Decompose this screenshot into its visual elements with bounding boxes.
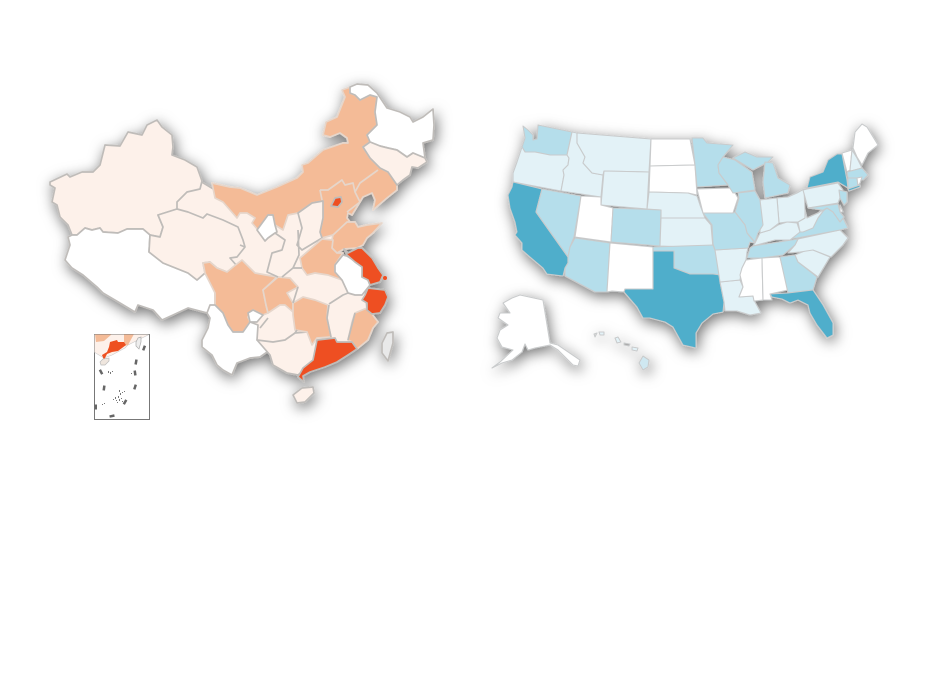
state: Kansas	[660, 218, 713, 248]
province: Tibet	[65, 228, 215, 320]
state: Pennsylvania	[803, 183, 843, 208]
state: North Carolina	[788, 230, 848, 257]
state: Connecticut	[848, 178, 858, 189]
state: Idaho	[561, 132, 603, 197]
province: Anhui	[335, 255, 370, 295]
state: Long Island	[848, 185, 860, 191]
state: Maryland	[808, 204, 844, 222]
state: Rhode Island	[857, 177, 862, 186]
state: Nebraska	[647, 192, 705, 218]
province: Henan	[300, 239, 343, 280]
state: Arkansas	[715, 248, 748, 282]
state: Oklahoma	[653, 245, 720, 275]
state: Oregon	[513, 147, 569, 191]
state: South Dakota	[649, 165, 697, 195]
island: Hainan	[293, 387, 314, 403]
state: Hawaii Kauai	[599, 332, 604, 335]
island: Taiwan	[382, 332, 393, 361]
state: Georgia	[780, 255, 817, 293]
state: Hawaii Oahu	[615, 337, 621, 343]
province borders over orange	[320, 170, 378, 212]
map: United States	[492, 124, 878, 370]
province: Shandong	[331, 222, 382, 253]
province: Zhejiang	[362, 288, 388, 314]
map: China provinces	[50, 84, 434, 403]
state: Louisiana	[720, 280, 761, 315]
state: Washington	[522, 125, 572, 155]
maps canvas	[44, 78, 888, 420]
state: Massachusetts	[847, 168, 868, 180]
state: Mississippi	[739, 258, 763, 301]
state: Hawaii main island	[639, 356, 649, 370]
province: Fujian	[348, 308, 378, 349]
province: Qinghai	[149, 209, 245, 280]
state: Ohio	[777, 189, 805, 223]
region: central pale provinces	[150, 178, 367, 373]
state: Wisconsin	[718, 157, 755, 193]
state: Alaska	[492, 295, 580, 368]
state: Illinois	[735, 191, 763, 242]
province: Shanxi	[297, 201, 323, 250]
state: New Mexico	[607, 243, 653, 292]
state: Missouri	[703, 212, 755, 250]
state: Iowa	[697, 188, 738, 213]
state: Colorado	[611, 208, 661, 246]
state: Delaware	[840, 205, 843, 212]
state: California	[508, 182, 568, 276]
province: Jilin	[363, 142, 427, 185]
state: Arizona	[565, 238, 610, 292]
state: Texas	[624, 251, 724, 348]
state: South Carolina	[795, 250, 830, 277]
province: Guangdong	[298, 338, 357, 382]
state: Hawaii Maui	[632, 347, 638, 351]
state: Hawaii Molokai	[624, 343, 630, 346]
province: Chongqing	[263, 277, 298, 313]
province: Jiangsu	[344, 248, 383, 285]
state: Wyoming	[601, 171, 649, 209]
state: Maine	[853, 124, 878, 165]
state: North Dakota	[650, 139, 695, 166]
state: Montana	[577, 133, 651, 175]
state: Florida	[770, 290, 833, 338]
province: Yunnan	[202, 305, 270, 375]
inset: nine-dash line	[94, 345, 146, 418]
province: Guangxi coast	[257, 332, 317, 375]
state: New Hampshire	[850, 150, 862, 171]
state: Kentucky	[753, 222, 800, 246]
state: Indiana	[760, 198, 779, 233]
province: Hunan	[293, 297, 331, 345]
state: New York	[807, 154, 848, 188]
state: Alabama	[762, 257, 788, 300]
province: Shanghai	[383, 276, 387, 280]
inset: South China Sea	[94, 334, 150, 420]
province: Beijing	[331, 197, 342, 207]
province borders	[240, 230, 355, 340]
state: Utah	[575, 196, 613, 242]
province: Heilongjiang	[350, 84, 434, 158]
province: Xinjiang	[50, 120, 202, 237]
state: Virginia	[775, 208, 848, 240]
inset frame	[94, 334, 150, 420]
state: Vermont	[842, 150, 852, 172]
inset: small islands	[102, 371, 132, 405]
inset mini map	[94, 334, 150, 365]
state: Michigan lower	[763, 162, 790, 198]
state: Tennessee	[747, 239, 798, 258]
state: Hawaii Niihau	[594, 333, 597, 337]
state: New Jersey	[839, 190, 847, 205]
state: Minnesota	[692, 138, 733, 187]
state: West Virginia	[798, 210, 824, 232]
province: Sichuan	[203, 260, 277, 332]
province: Ningxia	[257, 215, 277, 241]
state: Nevada	[536, 189, 581, 257]
state: Michigan upper	[733, 152, 773, 170]
province: Inner Mongolia, Hebei, Liaoning	[212, 87, 397, 238]
